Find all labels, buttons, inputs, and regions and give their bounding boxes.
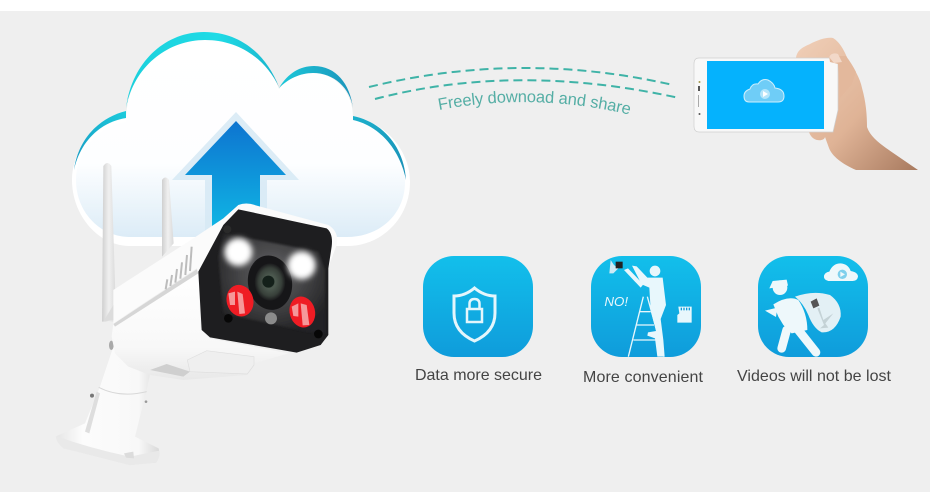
cloud rim: right lobe (353, 116, 406, 180)
phone in hand (694, 38, 918, 170)
bracket arm and base (56, 341, 160, 465)
white lamps (224, 238, 252, 266)
label: Videos will not be lost (737, 368, 892, 385)
cloud rim: big lobe (126, 32, 279, 108)
thief (765, 280, 807, 333)
vents (166, 247, 192, 289)
cloud inner gradient (76, 44, 405, 237)
camera hood (103, 203, 337, 327)
mounting plate (187, 351, 254, 374)
stolen camera (811, 298, 819, 308)
tile: more convenient (583, 256, 704, 386)
thumb (829, 56, 856, 98)
caption: Freely downoad and share: Freely downoad and share (438, 91, 630, 114)
camera body (112, 270, 288, 380)
phone body (694, 58, 838, 132)
NO!: NO! (604, 294, 628, 309)
screen cloud icon (744, 80, 784, 102)
sensor and screws (265, 312, 277, 324)
label: More convenient (583, 369, 704, 386)
tile: data more secure (415, 256, 542, 384)
icon: shield with lock (454, 288, 495, 341)
cloud white body (72, 40, 410, 246)
lens (244, 252, 296, 313)
cloud rim: left lobe (74, 111, 126, 170)
security camera (56, 163, 337, 465)
phone buttons (698, 81, 700, 115)
upload arrow (172, 112, 299, 240)
phone screen (707, 61, 824, 129)
mini camera (609, 260, 618, 273)
tile: videos will not be lost (737, 256, 892, 385)
sack (795, 293, 841, 332)
wireless dashed lines (369, 68, 679, 99)
antennas (102, 163, 174, 322)
label: Data more secure (415, 367, 542, 384)
red LEDs (223, 282, 257, 320)
hand (796, 38, 918, 170)
icon: thief with sack (765, 263, 858, 352)
cloud (72, 32, 410, 246)
corner cloud (824, 263, 858, 281)
cloud rim: small lobe (279, 66, 353, 108)
camera front face (198, 209, 332, 353)
